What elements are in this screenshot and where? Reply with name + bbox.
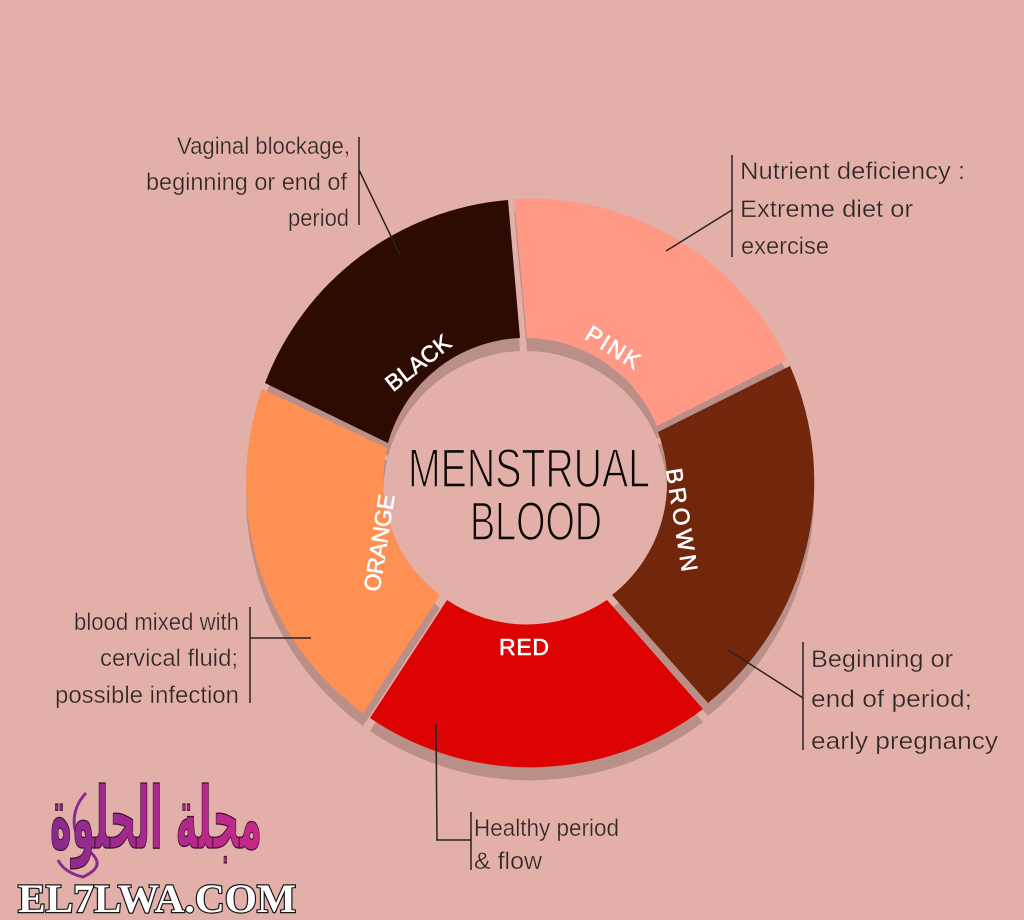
center title bbox=[408, 437, 650, 552]
segment: brown: BROWN bbox=[661, 466, 703, 573]
logo: EL7LWA.COM bbox=[18, 876, 296, 920]
callout: red: & flow bbox=[474, 848, 543, 875]
callout: brown: early pregnancy bbox=[811, 728, 998, 755]
callout: pink: Extreme diet or bbox=[740, 196, 913, 223]
callout: black: Vaginal blockage, bbox=[177, 133, 350, 160]
callout: red bbox=[436, 724, 619, 875]
callout: brown bbox=[728, 642, 998, 755]
logo: مجلة الحلوة bbox=[50, 770, 262, 869]
segment: brown bbox=[612, 366, 814, 703]
segment: orange: ORANGE bbox=[359, 492, 400, 593]
callout: red: Healthy period bbox=[474, 815, 619, 842]
center title: MENSTRUAL bbox=[408, 437, 650, 499]
callout: brown: Beginning or bbox=[811, 646, 953, 673]
segment: pink bbox=[514, 199, 787, 426]
callout: orange bbox=[55, 607, 311, 709]
segment: orange bbox=[246, 389, 440, 713]
callout: pink: Nutrient deficiency : bbox=[740, 158, 965, 185]
callout: brown: end of period; bbox=[811, 686, 972, 713]
callout: black: beginning or end of bbox=[146, 169, 347, 196]
callout: pink: exercise bbox=[741, 233, 829, 260]
segment: black bbox=[265, 200, 520, 443]
callout: orange: cervical fluid; bbox=[100, 645, 238, 672]
center title: BLOOD bbox=[470, 490, 602, 552]
callout: black: period bbox=[288, 205, 349, 232]
segment: pink: PINK bbox=[581, 320, 646, 374]
segment: red bbox=[370, 600, 703, 767]
callout: orange: blood mixed with bbox=[74, 609, 239, 636]
callout: pink bbox=[666, 155, 965, 260]
callout: black bbox=[146, 133, 400, 255]
logo bbox=[18, 770, 296, 920]
donut drop shadow bbox=[246, 212, 814, 780]
segment: black: BLACK bbox=[380, 329, 457, 396]
segment: red: RED bbox=[499, 634, 549, 660]
callout: orange: possible infection bbox=[55, 682, 239, 709]
